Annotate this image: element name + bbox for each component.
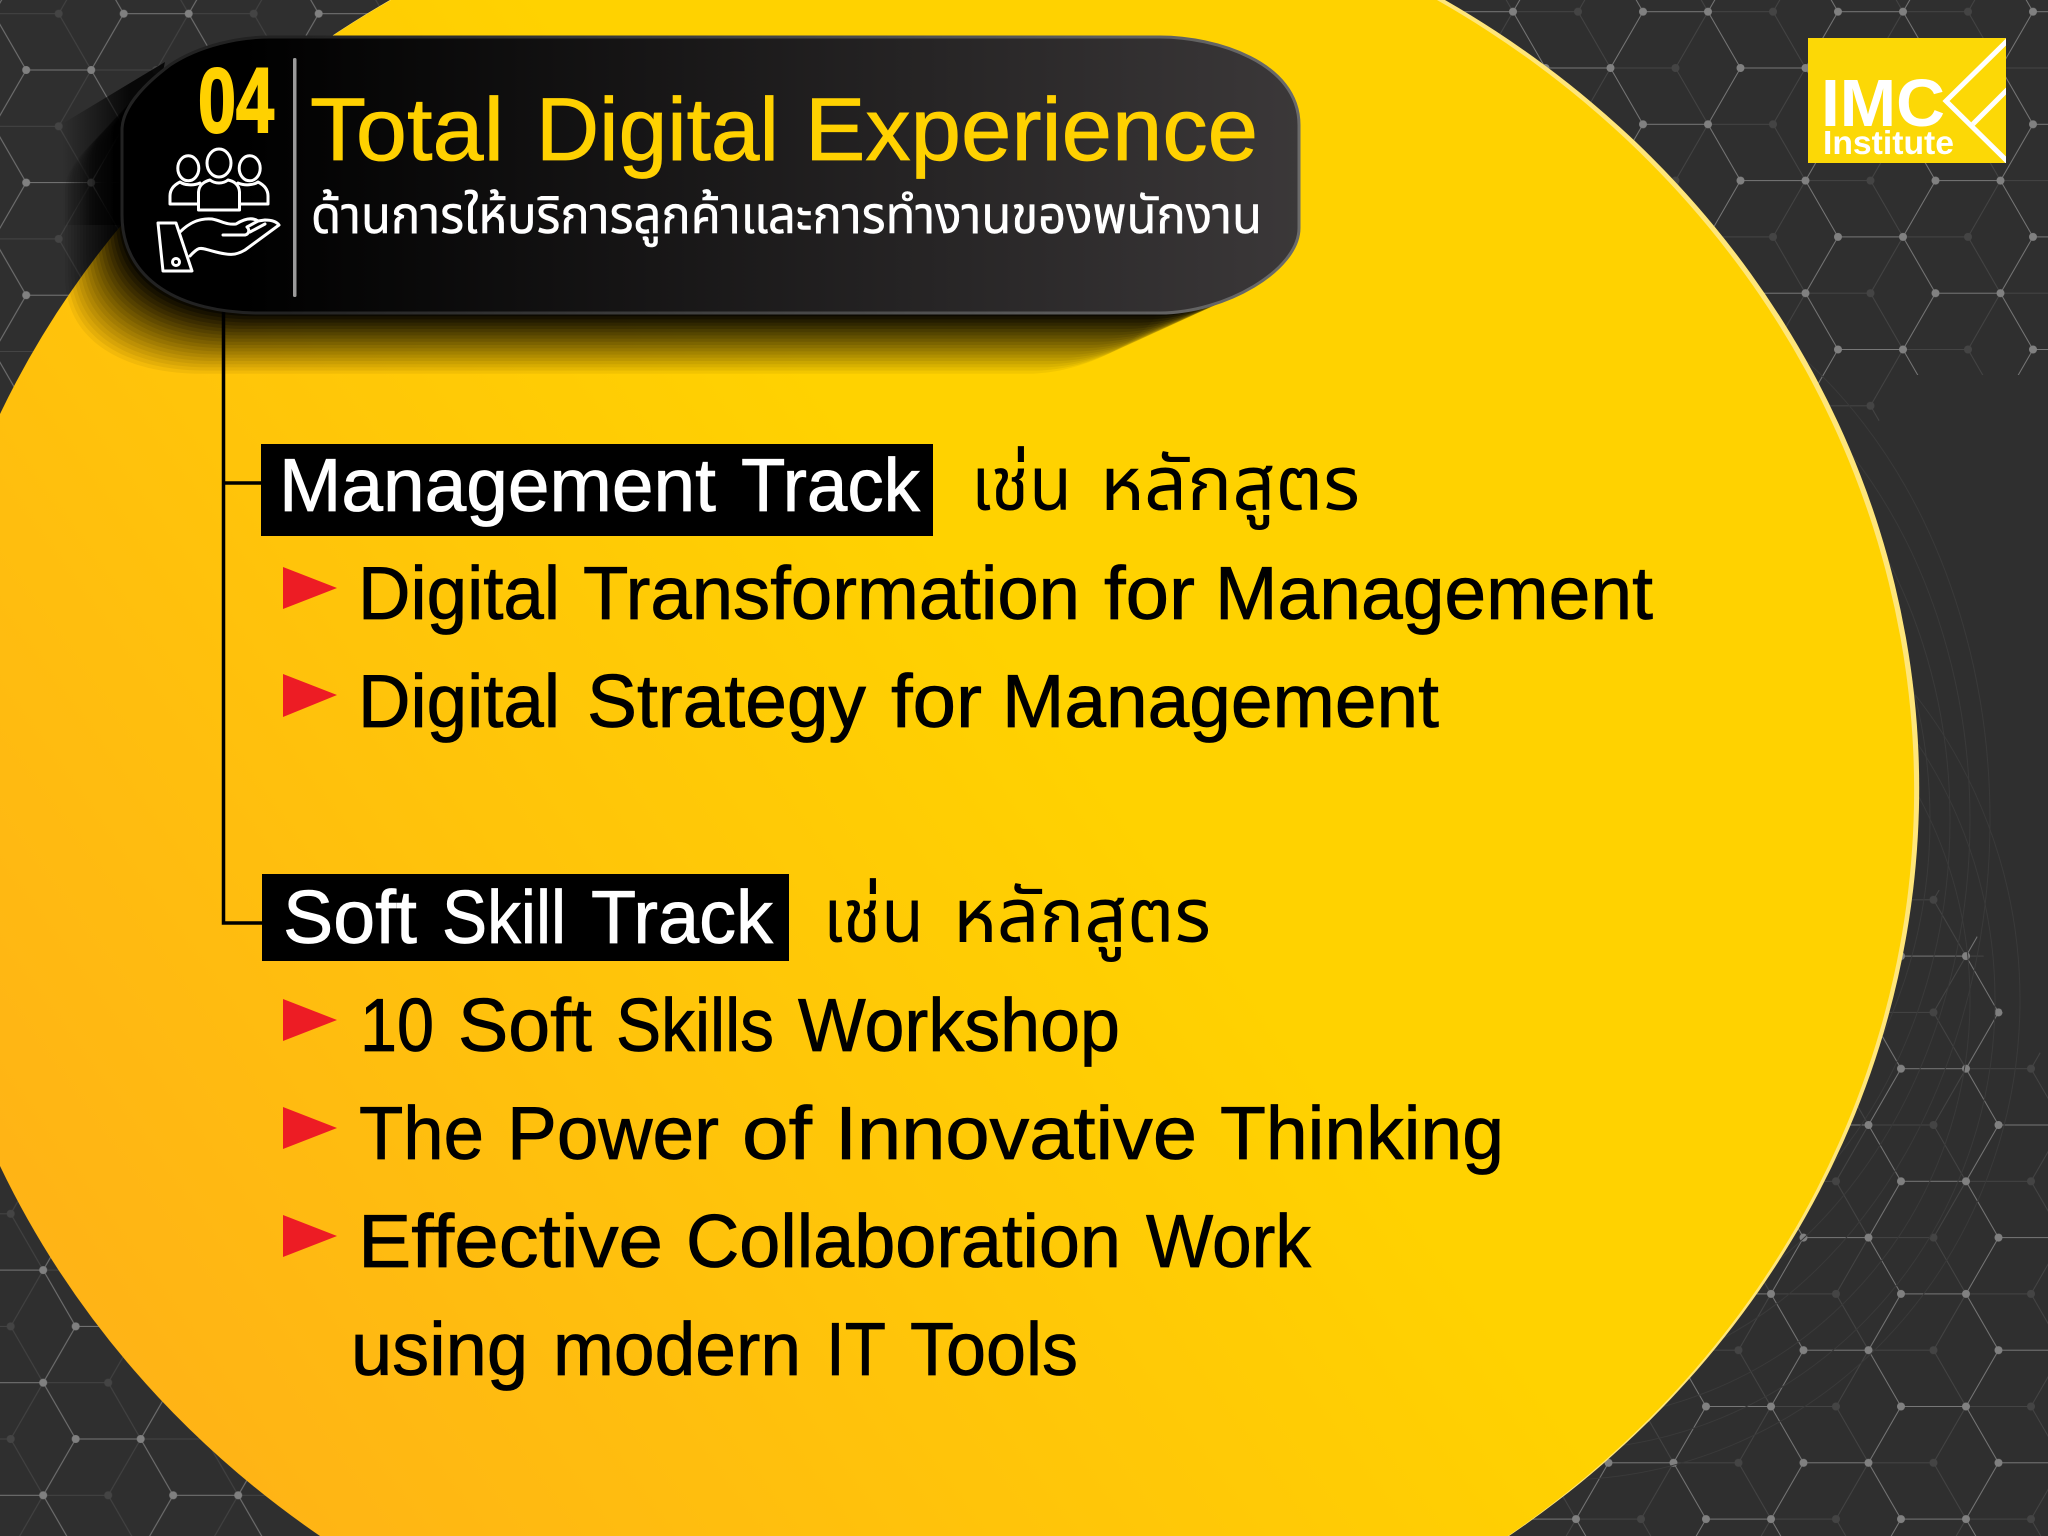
Thai caption: หลักสูตร [1100, 442, 1360, 530]
heading: Total Digital Experience: Experience [805, 79, 1258, 179]
bullet arrow [283, 567, 337, 609]
long shadow of header pill [0, 40, 1296, 374]
course: The Power of Innovative Thinking: The [359, 1091, 484, 1175]
course: Digital Strategy for Management: for [891, 659, 982, 743]
divider [293, 58, 296, 297]
label: Soft Skill Track: Skill [442, 875, 566, 959]
course: Digital Transformation for Management: for [1104, 551, 1195, 635]
heading: Total Digital Experience [310, 79, 1258, 179]
logo: IMC Institute: Institute [1823, 124, 1954, 161]
course: 10 Soft Skills Workshop: Skills [616, 983, 774, 1067]
bullet arrow [283, 1107, 337, 1149]
course continuation: using modern IT Tools [351, 1307, 1078, 1391]
logo: IMC Institute [1808, 38, 2008, 163]
logo: IMC Institute: IMC [1821, 66, 1945, 141]
course: 10 Soft Skills Workshop: Soft [458, 983, 592, 1067]
course: Digital Strategy for Management: Management [1002, 659, 1439, 743]
course: Digital Strategy for Management: Digital [358, 659, 560, 743]
bullet arrow [283, 1215, 337, 1257]
heading: Total Digital Experience: Digital [536, 79, 779, 179]
bullet arrow [283, 674, 337, 717]
course: The Power of Innovative Thinking [359, 1091, 1504, 1175]
Thai caption: เช่น [823, 874, 924, 958]
course: The Power of Innovative Thinking: Innovative [835, 1091, 1197, 1175]
label: Soft Skill Track: Track [591, 875, 773, 959]
course: Effective Collaboration Work: Effective [358, 1199, 663, 1283]
label: Management Track: Track [741, 443, 920, 527]
Thai caption [823, 874, 1211, 962]
course: The Power of Innovative Thinking: of [742, 1091, 812, 1175]
bullet arrow [283, 999, 337, 1041]
course: 10 Soft Skills Workshop: 10 [360, 983, 434, 1067]
header pill [122, 37, 1299, 313]
icon: people on open hand [158, 149, 279, 271]
subheading in Thai: ด้านการให้บริการลูกค้าและการทำงานของพนักงาน [311, 187, 1262, 247]
course: The Power of Innovative Thinking: Thinking [1220, 1091, 1504, 1175]
course continuation: using modern IT Tools: Tools [910, 1307, 1078, 1391]
label: Soft Skill Track [262, 874, 789, 961]
course: The Power of Innovative Thinking: Power [507, 1091, 719, 1175]
Thai caption: เช่น [971, 442, 1072, 526]
course: Effective Collaboration Work [358, 1199, 1311, 1283]
connector lines tree [224, 300, 262, 923]
Thai caption [971, 442, 1360, 530]
course: Effective Collaboration Work: Collaboration [686, 1199, 1121, 1283]
course: Digital Transformation for Management: Digital [358, 551, 560, 635]
label: Soft Skill Track: Soft [283, 875, 417, 959]
label: Management Track: Management [279, 443, 716, 527]
course continuation: using modern IT Tools: modern [553, 1307, 801, 1391]
Thai caption: หลักสูตร [953, 874, 1211, 962]
number 04: 04 [198, 50, 274, 152]
course: Effective Collaboration Work: Work [1146, 1199, 1311, 1283]
section: Soft Skill Track [262, 874, 1504, 1391]
label: Management Track [261, 443, 933, 536]
course: Digital Transformation for Management: Transformation [583, 551, 1080, 635]
heading: Total Digital Experience: Total [310, 79, 504, 179]
course: Digital Strategy for Management: Strategy [587, 659, 866, 743]
section: Management Track [261, 442, 1653, 743]
course: 10 Soft Skills Workshop: Workshop [798, 983, 1120, 1067]
course: Digital Transformation for Management [358, 551, 1653, 635]
course: Digital Strategy for Management [358, 659, 1439, 743]
course continuation: using modern IT Tools: using [351, 1307, 528, 1391]
course: Digital Transformation for Management: Management [1215, 551, 1653, 635]
course continuation: using modern IT Tools: IT [826, 1307, 886, 1391]
course: 10 Soft Skills Workshop [360, 983, 1120, 1067]
